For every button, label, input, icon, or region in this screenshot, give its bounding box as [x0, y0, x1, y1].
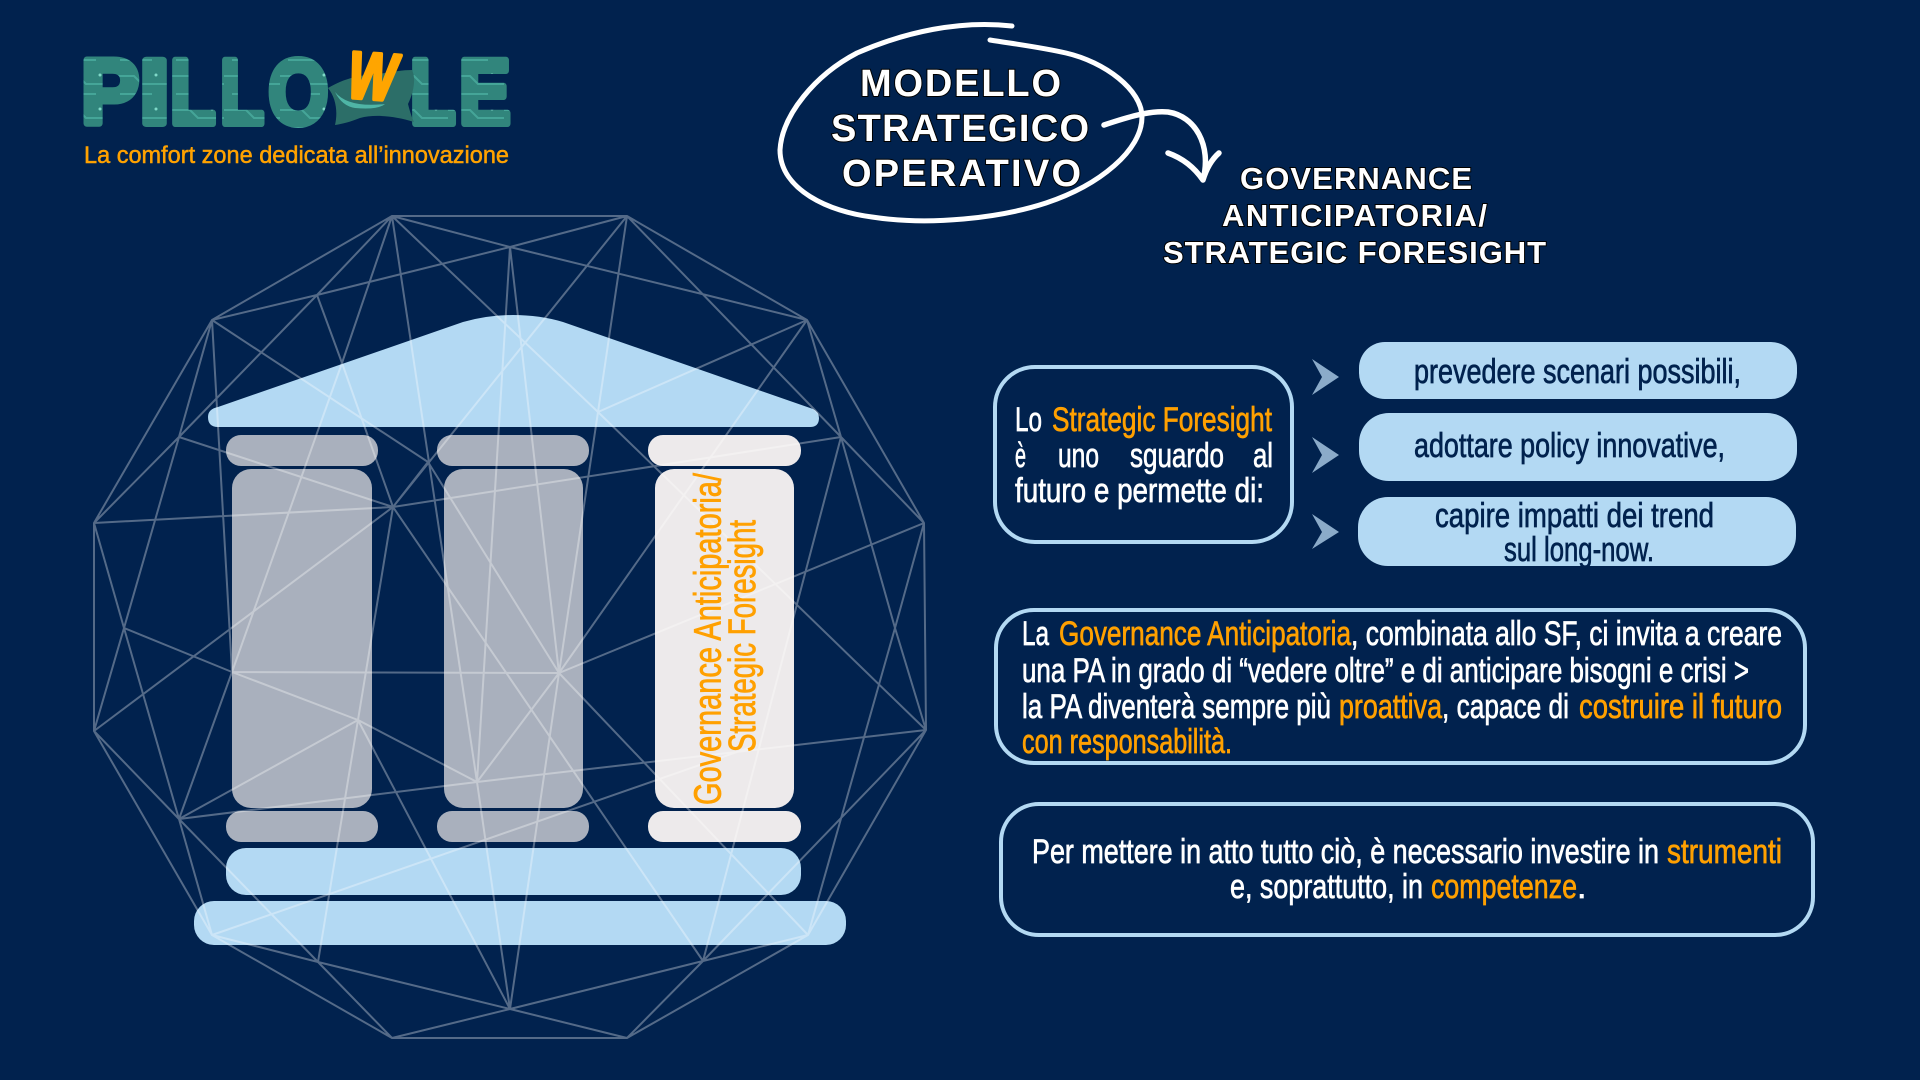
panel: strumenti e competenze: e, soprattutto, in [1230, 868, 1423, 906]
logo wordmark: I [139, 42, 170, 144]
temple upper base [226, 848, 801, 895]
pill: prevedere scenari [1359, 342, 1797, 399]
logo wordmark [81, 42, 511, 144]
logo [81, 37, 511, 169]
panel: strategic foresight intro: Lo [1015, 401, 1042, 439]
pill: capire impatti: capire impatti dei trend [1435, 497, 1714, 535]
column 3 [648, 435, 801, 842]
subtitle text: GOVERNANCE [1240, 161, 1472, 196]
panel: governance anticipatoria: proattiva [1339, 688, 1442, 726]
panel: governance anticipatoria: la PA diventerà sempre più [1022, 688, 1331, 726]
title: hand-drawn circle [780, 24, 1219, 221]
panel: governance anticipatoria: costruire il futuro [1579, 688, 1782, 726]
column 2 [437, 435, 589, 842]
pill: adottare policy: adottare policy innovative, [1414, 427, 1725, 465]
subtitle text: STRATEGIC FORESIGHT [1163, 235, 1546, 270]
logo wordmark: E [459, 42, 511, 144]
column 3 label [688, 473, 764, 805]
title text: OPERATIVO [842, 153, 1081, 195]
column 1 [226, 435, 378, 842]
subtitle text: ANTICIPATORIA/ [1222, 198, 1487, 233]
logo pillow [328, 70, 414, 125]
panel: governance anticipatoria: con responsabilità. [1022, 723, 1232, 761]
panel: strategic foresight intro [995, 367, 1292, 542]
panel: strumenti e competenze: competenze [1431, 868, 1577, 906]
arrow chevrons [1312, 359, 1339, 549]
title text: MODELLO [860, 63, 1061, 105]
panel: governance anticipatoria: Governance Anticipatoria [1059, 615, 1351, 653]
pill: adottare policy [1359, 413, 1797, 481]
panel: governance anticipatoria [996, 610, 1805, 763]
logo wordmark: L [410, 42, 456, 144]
panel: governance anticipatoria: , combinata allo SF, ci invita a creare [1351, 615, 1782, 653]
logo wordmark: L [220, 42, 264, 144]
title text [831, 63, 1089, 195]
logo wordmark: O [268, 42, 328, 144]
column 3 label: Strategic Foresight [722, 520, 764, 752]
panel: strategic foresight intro: al [1253, 437, 1273, 475]
panel: strategic foresight intro: uno [1058, 437, 1099, 475]
panel: strategic foresight intro: sguardo [1130, 437, 1224, 475]
temple illustration [194, 315, 846, 945]
title text: STRATEGICO [831, 108, 1089, 150]
panel: strumenti e competenze [1001, 804, 1813, 935]
panel: governance anticipatoria: , capace di [1442, 688, 1569, 726]
panel: strategic foresight intro: Strategic Foresight [1052, 401, 1272, 439]
panel: strumenti e competenze: Per mettere in atto tutto ciò, è necessario investire in [1032, 833, 1659, 871]
title arrow [1104, 112, 1219, 180]
wireframe geodesic sphere [94, 216, 926, 1038]
panel: governance anticipatoria: La [1022, 615, 1049, 653]
panel: strumenti e competenze: . [1577, 868, 1586, 906]
temple roof [208, 315, 819, 427]
panel: strategic foresight intro: è [1015, 437, 1026, 475]
panel: strategic foresight intro: futuro e permette di: [1015, 472, 1264, 510]
subtitle text [1163, 161, 1546, 270]
logo wordmark: P [81, 42, 139, 144]
pill: capire impatti: sul long-now. [1504, 531, 1654, 569]
column 3 label: Governance Anticipatoria/ [688, 473, 730, 805]
logo wordmark: L [170, 42, 216, 144]
logo tagline: La comfort zone dedicata all’innovazione [84, 142, 509, 169]
logo letter W: W [346, 37, 402, 115]
temple lower base [194, 901, 846, 945]
pill: capire impatti [1358, 497, 1796, 569]
pill: prevedere scenari: prevedere scenari possibili, [1414, 353, 1741, 391]
panel: strumenti e competenze: strumenti [1667, 833, 1782, 871]
